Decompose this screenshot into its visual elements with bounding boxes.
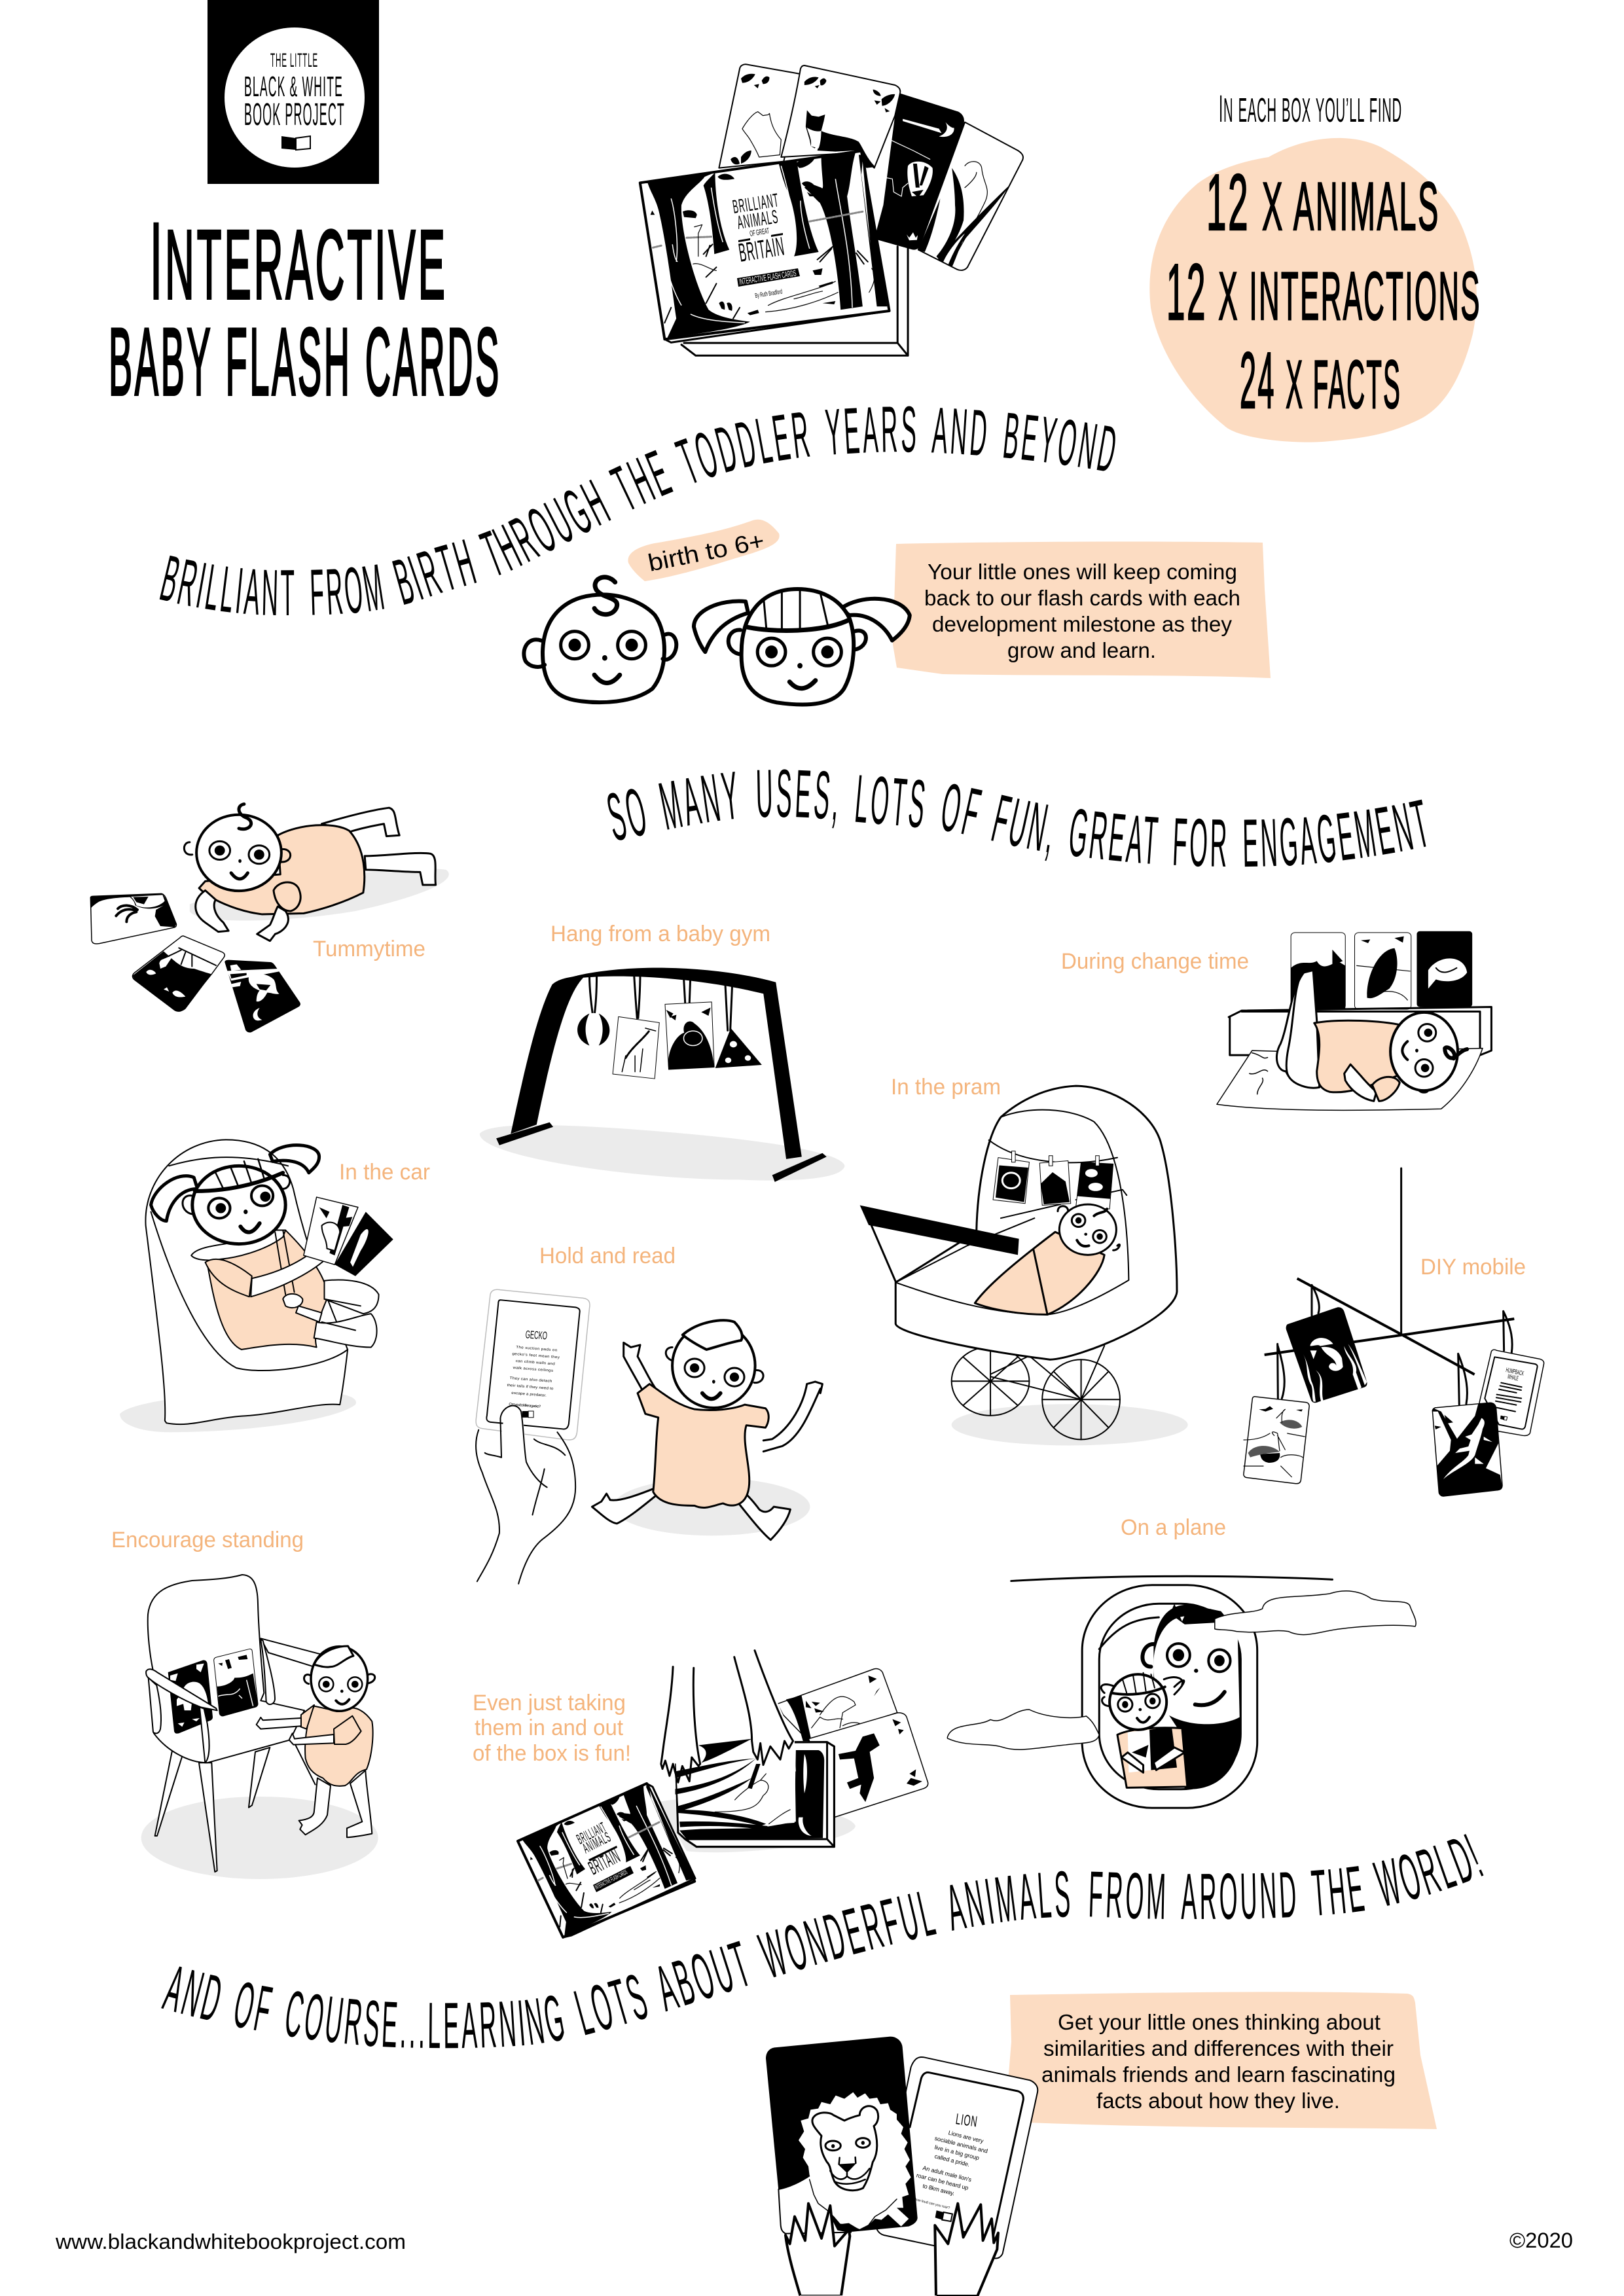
label: even just taking them in and out: of the box is fun! [473, 1741, 631, 1766]
label: in the pram: In the pram [891, 1075, 1001, 1100]
label: even just taking them in and out [473, 1691, 631, 1766]
illustration: DIY mobile: WHALE [1507, 1373, 1519, 1382]
illustration: DIY mobile: HUMPBACK [1505, 1367, 1525, 1378]
label: even just taking them in and out: them in and out [475, 1715, 624, 1740]
heading: so many uses: SO MANY USES, LOTS OF FUN, GREAT FOR ENGAGEMENT [607, 769, 1426, 867]
panel: keep coming back callout: back to our flash cards with each [924, 586, 1240, 610]
illustration: gecko fact card in hand: They can also detach [509, 1376, 552, 1384]
illustration: toddler face [694, 589, 910, 704]
illustration: flash cards box: ANIMALS [736, 206, 780, 234]
illustration: gecko fact card in hand: escape a predator. [511, 1391, 547, 1398]
label: tummytime: Tummytime [313, 937, 425, 961]
logo: THE LITTLE [270, 50, 318, 71]
illustration: baby face [524, 577, 676, 702]
illustration: gecko fact card in hand [476, 1289, 590, 1584]
illustration: closed box cover on floor: INTERACTIVE FLASH CARDS [594, 1869, 629, 1892]
illustration: gecko fact card in hand: can climb walls and [515, 1359, 555, 1366]
illustration: flash cards box: BRITAIN [737, 232, 787, 268]
panel: similarities callout [1005, 1992, 1437, 2129]
label: during change time: During change time [1061, 949, 1249, 974]
illustration: flash cards box: OF GREAT [749, 226, 770, 238]
panel: similarities callout: animals friends and learn fascinating [1041, 2062, 1396, 2087]
footer: website: www.blackandwhitebookproject.com [55, 2230, 406, 2253]
illustration: lion cards held in hands: to 8km away. [922, 2183, 956, 2197]
tag: birth to 6+ [628, 520, 780, 581]
logo: BLACK & WHITE [244, 71, 343, 103]
title [109, 201, 501, 415]
logo [208, 0, 379, 184]
illustration: lion cards held in hands: roar can be heard up [916, 2172, 969, 2191]
illustration: flash cards box: BRILLIANT [731, 190, 780, 218]
panel: keep coming back callout [893, 542, 1271, 678]
illustration: lion cards held in hands [766, 2037, 1038, 2296]
illustration: tummytime baby [184, 804, 449, 941]
illustration: lion cards held in hands: An adult male lion's [922, 2164, 973, 2183]
title: INTERACTIVE [150, 201, 448, 322]
illustration: plane window [947, 1576, 1416, 1808]
illustration: gecko fact card in hand: walk across ceilings [512, 1366, 553, 1373]
panel: similarities callout: facts about how they live. [1096, 2089, 1340, 2113]
illustration: DIY mobile [1244, 1168, 1544, 1496]
illustration: baby arms up [592, 1320, 822, 1540]
illustration: flash cards box [640, 64, 1023, 355]
illustration: gecko fact card in hand: gecko's feet mean they [512, 1352, 560, 1359]
text: BABY FLASH CARDS [109, 308, 501, 415]
tag: birth to 6+: birth to 6+ [646, 527, 767, 577]
panel: similarities callout: Get your little ones thinking about [1058, 2010, 1380, 2034]
illustration: gecko fact card in hand: The suction pads on [516, 1346, 557, 1353]
footer: copyright: ©2020 [1509, 2229, 1573, 2252]
illustration: girl in car seat [120, 1139, 393, 1432]
panel: box contents blob: 24 X FACTS [1240, 336, 1401, 425]
illustration: lion cards held in hands: Lions are very [948, 2129, 984, 2144]
panel: keep coming back callout: grow and learn. [1007, 638, 1156, 662]
illustration: closed box cover on floor [511, 1778, 700, 1941]
label: hang from a baby gym: Hang from a baby gym [550, 922, 770, 946]
illustration: closed box cover on floor: ANIMALS [580, 1829, 613, 1856]
illustration: lion cards held in hands: sociable animals and [934, 2135, 988, 2155]
panel: box contents blob [1149, 138, 1481, 442]
label: even just taking them in and out: Even just taking [473, 1691, 626, 1715]
illustration: gecko fact card in hand: their tails if they need to [507, 1384, 554, 1391]
illustration: baby gym [480, 968, 844, 1182]
label: encourage standing: Encourage standing [111, 1528, 304, 1552]
label: DIY mobile: DIY mobile [1420, 1255, 1526, 1280]
illustration: change time [1217, 931, 1491, 1110]
heading: brilliant from birth: BRILLIANT FROM BIRTH THROUGH THE TODDLER YEARS AND BEYOND [160, 406, 1115, 615]
label: on a plane: On a plane [1121, 1515, 1226, 1540]
illustration: flash cards box: INTERACTIVE FLASH CARDS [738, 268, 797, 287]
illustration: closed box cover on floor: BRITAIN [585, 1846, 624, 1879]
illustration: flash cards box: By Ruth Bradford [755, 289, 783, 300]
illustration: lion cards held in hands: LION [955, 2110, 979, 2130]
label: hold and read: Hold and read [539, 1244, 676, 1268]
illustration: lion cards held in hands: How loud can you roar? [913, 2197, 950, 2210]
illustration: closed box cover on floor: BRILLIANT [574, 1819, 609, 1847]
illustration: gecko fact card in hand: Can you look like a gecko? [509, 1403, 541, 1409]
illustration: gecko fact card in hand: GECKO [525, 1328, 548, 1342]
text: BOOK PROJECT [244, 98, 345, 132]
illustration: pram [860, 1086, 1188, 1445]
illustration: box and cards [659, 1651, 928, 1852]
heading: learning lots about animals: AND OF COURSE...LEARNING LOTS ABOUT WONDERFUL ANIMALS FROM AROUND THE WORLD! [161, 1834, 1483, 2049]
illustration: baby standing at chair [141, 1575, 378, 1879]
illustration: lion cards held in hands: live in a big group [934, 2144, 980, 2161]
panel: keep coming back callout: development milestone as they [932, 612, 1232, 636]
panel: similarities callout: similarities and differences with their [1043, 2036, 1394, 2060]
label: in the car: In the car [339, 1160, 430, 1185]
icon: cards on floor [90, 893, 300, 1033]
panel: keep coming back callout: Your little ones will keep coming [928, 560, 1237, 584]
illustration: lion cards held in hands: called a pride. [934, 2153, 971, 2168]
